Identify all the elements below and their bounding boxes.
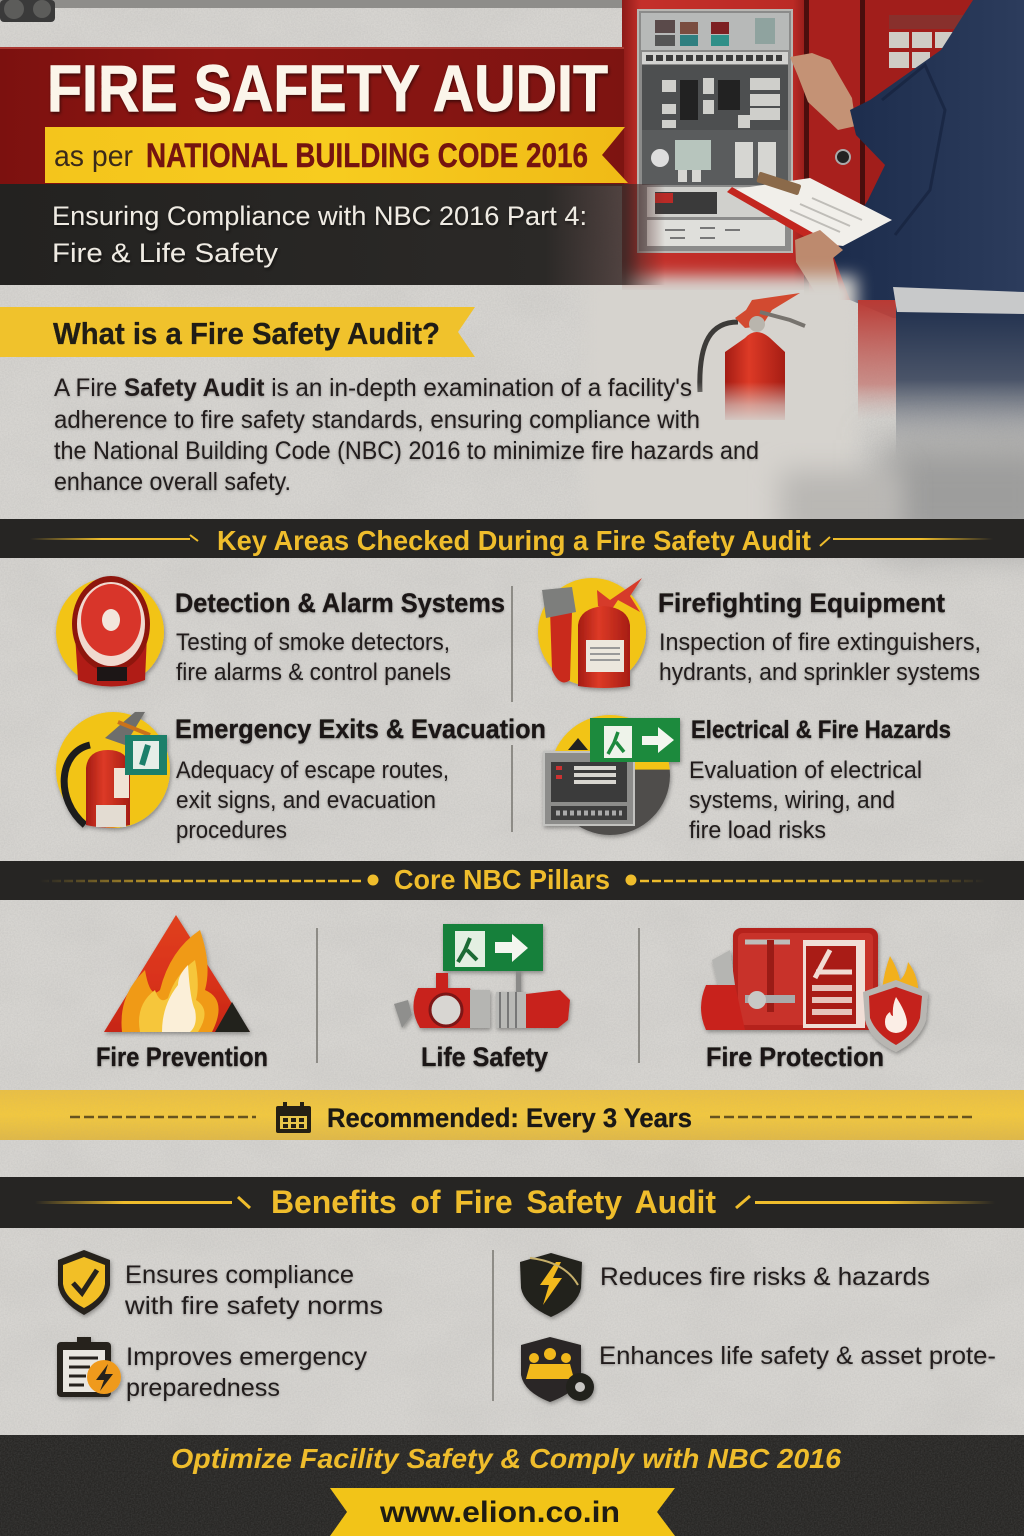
lower hand (795, 230, 843, 293)
text (126, 1343, 368, 1402)
photo: fire panel cabinet and inspector (622, 0, 1024, 322)
website ribbon: www.elion.co.in (379, 1496, 620, 1529)
text: preparedness (126, 1374, 280, 1402)
benefit: emergency preparedness (57, 1337, 368, 1402)
ribbon: as per National Building Code 2016: as per (54, 140, 133, 173)
icon: shield people and gear (521, 1337, 594, 1402)
benefit: compliance (58, 1250, 383, 1320)
text: Enhances life safety & asset prote- (599, 1342, 996, 1370)
ribbon: as per National Building Code 2016: NATIONAL BUILDING CODE 2016 (146, 137, 588, 175)
icon: fire triangle (104, 915, 250, 1032)
band: Key Areas Checked: Key Areas Checked During a Fire Safety Audit (217, 525, 811, 556)
pillar: Fire Prevention (96, 915, 268, 1072)
text: Improves emergency (126, 1343, 368, 1371)
text block: definition: adherence to fire safety standards, ensuring compliance with (54, 406, 700, 434)
subtitle: Fire & Life Safety (52, 238, 279, 268)
icon: alarm bell (56, 576, 164, 686)
pillar: Fire Protection (701, 928, 928, 1072)
header: red banner (0, 47, 624, 186)
heading ribbon: What is a Fire Safety Audit? (0, 307, 475, 357)
description: procedures (176, 817, 287, 844)
description: fire load risks (689, 817, 826, 844)
icon: wall fire extinguisher (692, 293, 807, 424)
icon: extinguisher and hose (538, 578, 646, 688)
description (689, 757, 922, 844)
banner: Recommended every 3 years (0, 1090, 1024, 1140)
benefit: reduces fire risks (520, 1253, 930, 1317)
text block: definition: enhance overall safety. (54, 468, 291, 496)
icon: shield check (58, 1250, 110, 1315)
heading: Detection & Alarm Systems (175, 588, 505, 618)
clipboard (727, 171, 892, 246)
icon: electrical panel and exit sign (544, 715, 680, 835)
description: fire alarms & control panels (176, 659, 451, 686)
heading: Electrical & Fire Hazards (691, 716, 951, 744)
description: Evaluation of electrical (689, 757, 922, 784)
description: Inspection of fire extinguishers, (659, 629, 981, 656)
heading ribbon: What is a Fire Safety Audit?: What is a Fire Safety Audit? (53, 316, 440, 351)
header: dark band with subtitle (0, 184, 665, 285)
text: Reduces fire risks & hazards (600, 1263, 930, 1291)
subtitle (52, 201, 587, 268)
key area: Firefighting Equipment (538, 578, 981, 688)
call to action: Optimize Facility Safety & Comply with NBC 2016 (171, 1443, 841, 1474)
icon: calendar (276, 1102, 311, 1133)
footer (0, 1435, 1024, 1536)
label: Life Safety (421, 1042, 548, 1072)
icon: shield lightning (520, 1253, 582, 1317)
heading: Firefighting Equipment (658, 588, 945, 618)
second panel buttons (889, 15, 967, 68)
description: hydrants, and sprinkler systems (659, 659, 980, 686)
red cabinet (622, 0, 812, 290)
description (176, 757, 449, 844)
text block: definition (54, 374, 759, 496)
icon: clipboard (57, 1337, 121, 1397)
label: Fire Prevention (96, 1042, 268, 1072)
subtitle: Ensuring Compliance with NBC 2016 Part 4: (52, 201, 587, 231)
text: with fire safety norms (124, 1292, 383, 1320)
band: Benefits of Fire Safety Audit: Benefits of Fire Safety Audit (271, 1184, 716, 1220)
text: Ensures compliance (125, 1261, 354, 1289)
key area: Detection & Alarm Systems (56, 576, 505, 686)
description (659, 629, 981, 686)
icon: exit sign and hydrant valve (394, 924, 570, 1028)
title: FIRE SAFETY AUDIT (47, 51, 608, 125)
key area: Electrical & Fire Hazards (544, 715, 951, 844)
band: Benefits of Fire Safety Audit (0, 1177, 1024, 1228)
text (124, 1261, 383, 1320)
hand on panel (790, 53, 856, 130)
top edge strip (0, 0, 622, 22)
benefit: life safety and asset protection (521, 1337, 996, 1402)
band: Core NBC Pillars (0, 861, 1024, 900)
reflective strip (893, 287, 1024, 314)
band: Key Areas Checked (0, 519, 1024, 558)
control panel module (638, 10, 792, 252)
description: exit signs, and evacuation (176, 787, 436, 814)
description: Adequacy of escape routes, (176, 757, 449, 784)
banner: Recommended every 3 years: Recommended: Every 3 Years (327, 1103, 692, 1133)
description (176, 629, 451, 686)
band: Core NBC Pillars: Core NBC Pillars (394, 864, 610, 895)
text block: definition: A Fire Safety Audit is an in-depth examination of a facility's (54, 374, 692, 402)
jacket (833, 0, 1024, 322)
ribbon: as per National Building Code 2016 (45, 127, 628, 183)
key area: Emergency Exits & Evacuation (56, 712, 546, 844)
heading: Emergency Exits & Evacuation (175, 714, 546, 744)
description: Testing of smoke detectors, (176, 629, 450, 656)
icon: cabinet, pump, shield (701, 928, 928, 1052)
description: systems, wiring, and (689, 787, 895, 814)
label: Fire Protection (706, 1042, 884, 1072)
fog and lower right cabinet, trousers (780, 287, 1024, 550)
text block: definition: the National Building Code (NBC) 2016 to minimize fire hazards and (54, 437, 759, 465)
icon: extinguisher and exit sign (56, 712, 170, 828)
mist under photo (585, 276, 857, 538)
pillar: Life Safety (394, 924, 570, 1072)
website ribbon (330, 1488, 675, 1536)
